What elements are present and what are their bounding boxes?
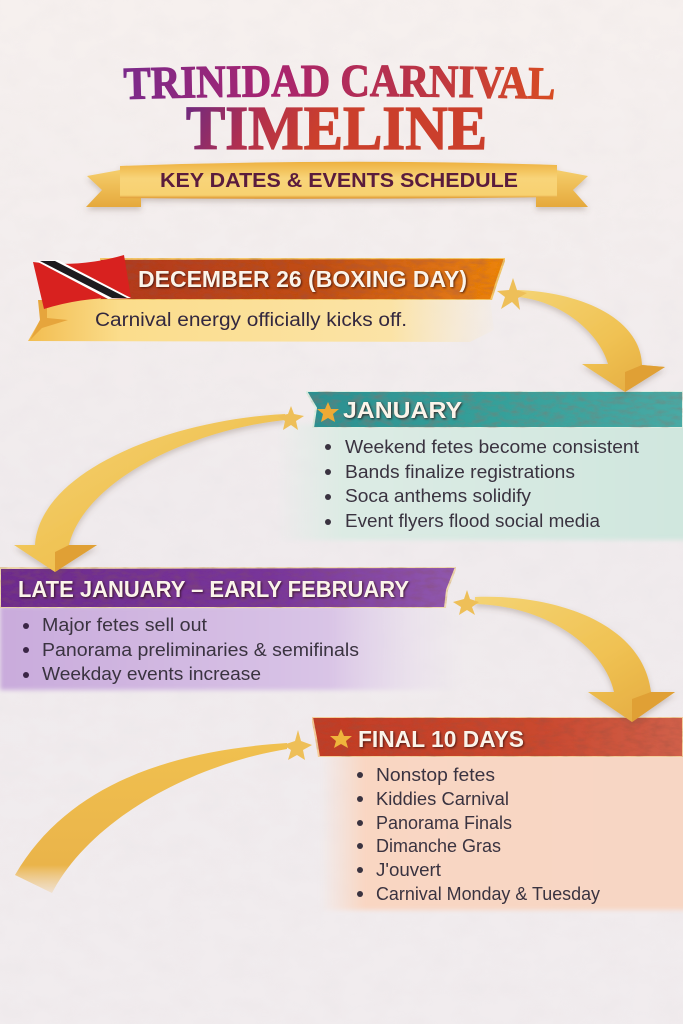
panel: January (275, 391, 683, 540)
purple header band (0, 567, 456, 608)
list: Kiddies Carnival (376, 788, 509, 809)
icon: star Final 10 Days (283, 730, 312, 760)
icon: star December (497, 278, 527, 310)
arrow: December to January (518, 290, 665, 392)
list (325, 436, 639, 531)
list: Carnival Monday & Tuesday (376, 883, 601, 904)
orange header band (100, 258, 505, 300)
title: TIMELINE (186, 95, 487, 163)
list: Soca anthems solidify (345, 485, 532, 506)
list (357, 764, 601, 904)
description: Carnival energy officially kicks off. (95, 310, 407, 331)
arrow: Late January to Final 10 Days (475, 597, 675, 722)
fold on the left of the banner (30, 300, 68, 340)
list (23, 614, 359, 684)
panel: December 26 (28, 258, 505, 342)
icon: star Late January (453, 590, 479, 615)
icon: star (317, 402, 339, 422)
teal header band (306, 391, 683, 428)
heading: LATE JANUARY – EARLY FEBRUARY (18, 576, 409, 602)
list: Event flyers flood social media (345, 510, 601, 531)
body (320, 754, 683, 910)
list: Weekday events increase (42, 663, 261, 684)
icon: star (330, 729, 352, 748)
heading: JANUARY (343, 397, 462, 423)
list: Major fetes sell out (42, 614, 207, 635)
panel: Final 10 Days (312, 717, 683, 910)
body (275, 424, 683, 540)
list: Weekend fetes become consistent (345, 436, 639, 457)
list: Panorama preliminaries & semifinals (42, 639, 359, 660)
list: Panorama Finals (376, 812, 512, 833)
title: TRINIDAD CARNIVAL (123, 65, 554, 100)
icon: Trinidad and Tobago flag (33, 255, 131, 309)
body (0, 606, 470, 690)
list: Nonstop fetes (376, 764, 495, 785)
panel: Late January to Early February (0, 567, 470, 690)
red header band (312, 717, 683, 757)
list: Bands finalize registrations (345, 461, 575, 482)
list: J'ouvert (376, 859, 441, 880)
arrow: Final 10 Days to Carnival end (15, 743, 287, 893)
subtitle ribbon (86, 162, 588, 207)
heading: FINAL 10 DAYS (358, 726, 524, 752)
cream body (28, 298, 494, 342)
heading: DECEMBER 26 (BOXING DAY) (138, 266, 467, 292)
title (123, 65, 554, 163)
arrow: January to Late January (14, 414, 285, 572)
icon: star January (277, 406, 304, 430)
ribbon text: KEY DATES & EVENTS SCHEDULE (160, 169, 518, 192)
list: Dimanche Gras (376, 835, 501, 856)
